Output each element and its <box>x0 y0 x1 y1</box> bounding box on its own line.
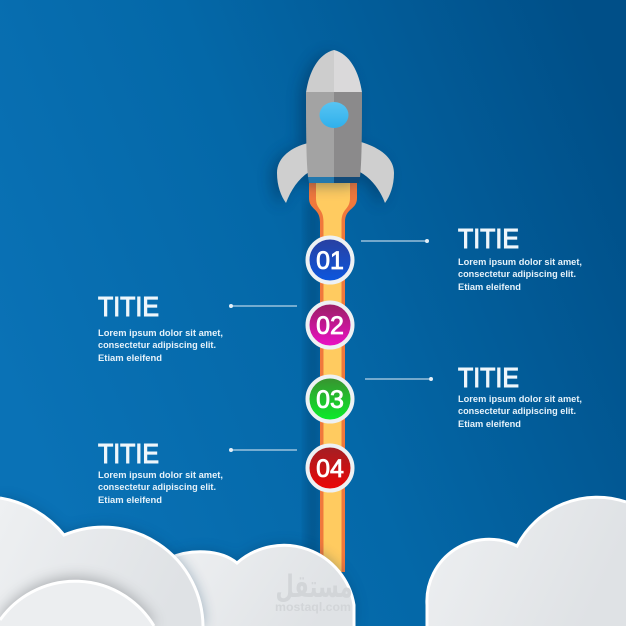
text block: 01 <box>458 223 582 292</box>
connector: 03 <box>365 377 433 381</box>
cloud: back middle <box>170 545 354 626</box>
text block: 01: Etiam eleifend <box>458 282 521 292</box>
rocket <box>271 50 394 206</box>
cloud: right <box>427 497 626 626</box>
text block: 03: TITIE <box>458 362 519 393</box>
text block: 02 <box>98 291 223 363</box>
text block: 01: consectetur adipiscing elit. <box>458 269 576 279</box>
cloud: left large <box>0 498 203 626</box>
text block: 04: TITIE <box>98 438 159 469</box>
text block: 02: TITIE <box>98 291 159 322</box>
base band <box>308 177 334 183</box>
badge: 01: 01 <box>316 247 344 275</box>
text block: 02: Lorem ipsum dolor sit amet, <box>98 328 223 338</box>
text block: 04: consectetur adipiscing elit. <box>98 482 216 492</box>
fin: right <box>360 142 394 203</box>
badge: 02 <box>308 302 352 348</box>
badge: 04: 04 <box>316 455 344 483</box>
cloud: inner front <box>0 577 154 626</box>
badge: 04 <box>308 446 352 490</box>
text block: 04: Lorem ipsum dolor sit amet, <box>98 470 223 480</box>
window <box>320 102 348 128</box>
badge: 02: 02 <box>316 312 344 340</box>
watermark: mostaql.com <box>275 600 351 614</box>
fin: left <box>277 143 309 203</box>
text block: 04: Etiam eleifend <box>98 495 162 505</box>
text block: 02: consectetur adipiscing elit. <box>98 340 216 350</box>
text block: 03 <box>458 362 582 429</box>
text block: 03: Etiam eleifend <box>458 419 521 429</box>
connector: 02 <box>229 304 297 308</box>
text block: 02: Etiam eleifend <box>98 353 162 363</box>
text block: 04 <box>98 438 223 505</box>
text block: 01: TITIE <box>458 223 519 254</box>
badge: 03 <box>308 376 352 422</box>
badge: 01 <box>308 238 352 282</box>
connector: 01 <box>361 239 429 243</box>
watermark: مستقل <box>275 569 353 605</box>
nose cone <box>306 50 334 92</box>
exhaust flame <box>306 183 357 572</box>
connector: 04 <box>229 448 297 452</box>
text block: 01: Lorem ipsum dolor sit amet, <box>458 257 582 267</box>
text block: 03: Lorem ipsum dolor sit amet, <box>458 394 582 404</box>
body <box>306 92 334 177</box>
text block: 03: consectetur adipiscing elit. <box>458 406 576 416</box>
badge: 03: 03 <box>316 386 344 414</box>
